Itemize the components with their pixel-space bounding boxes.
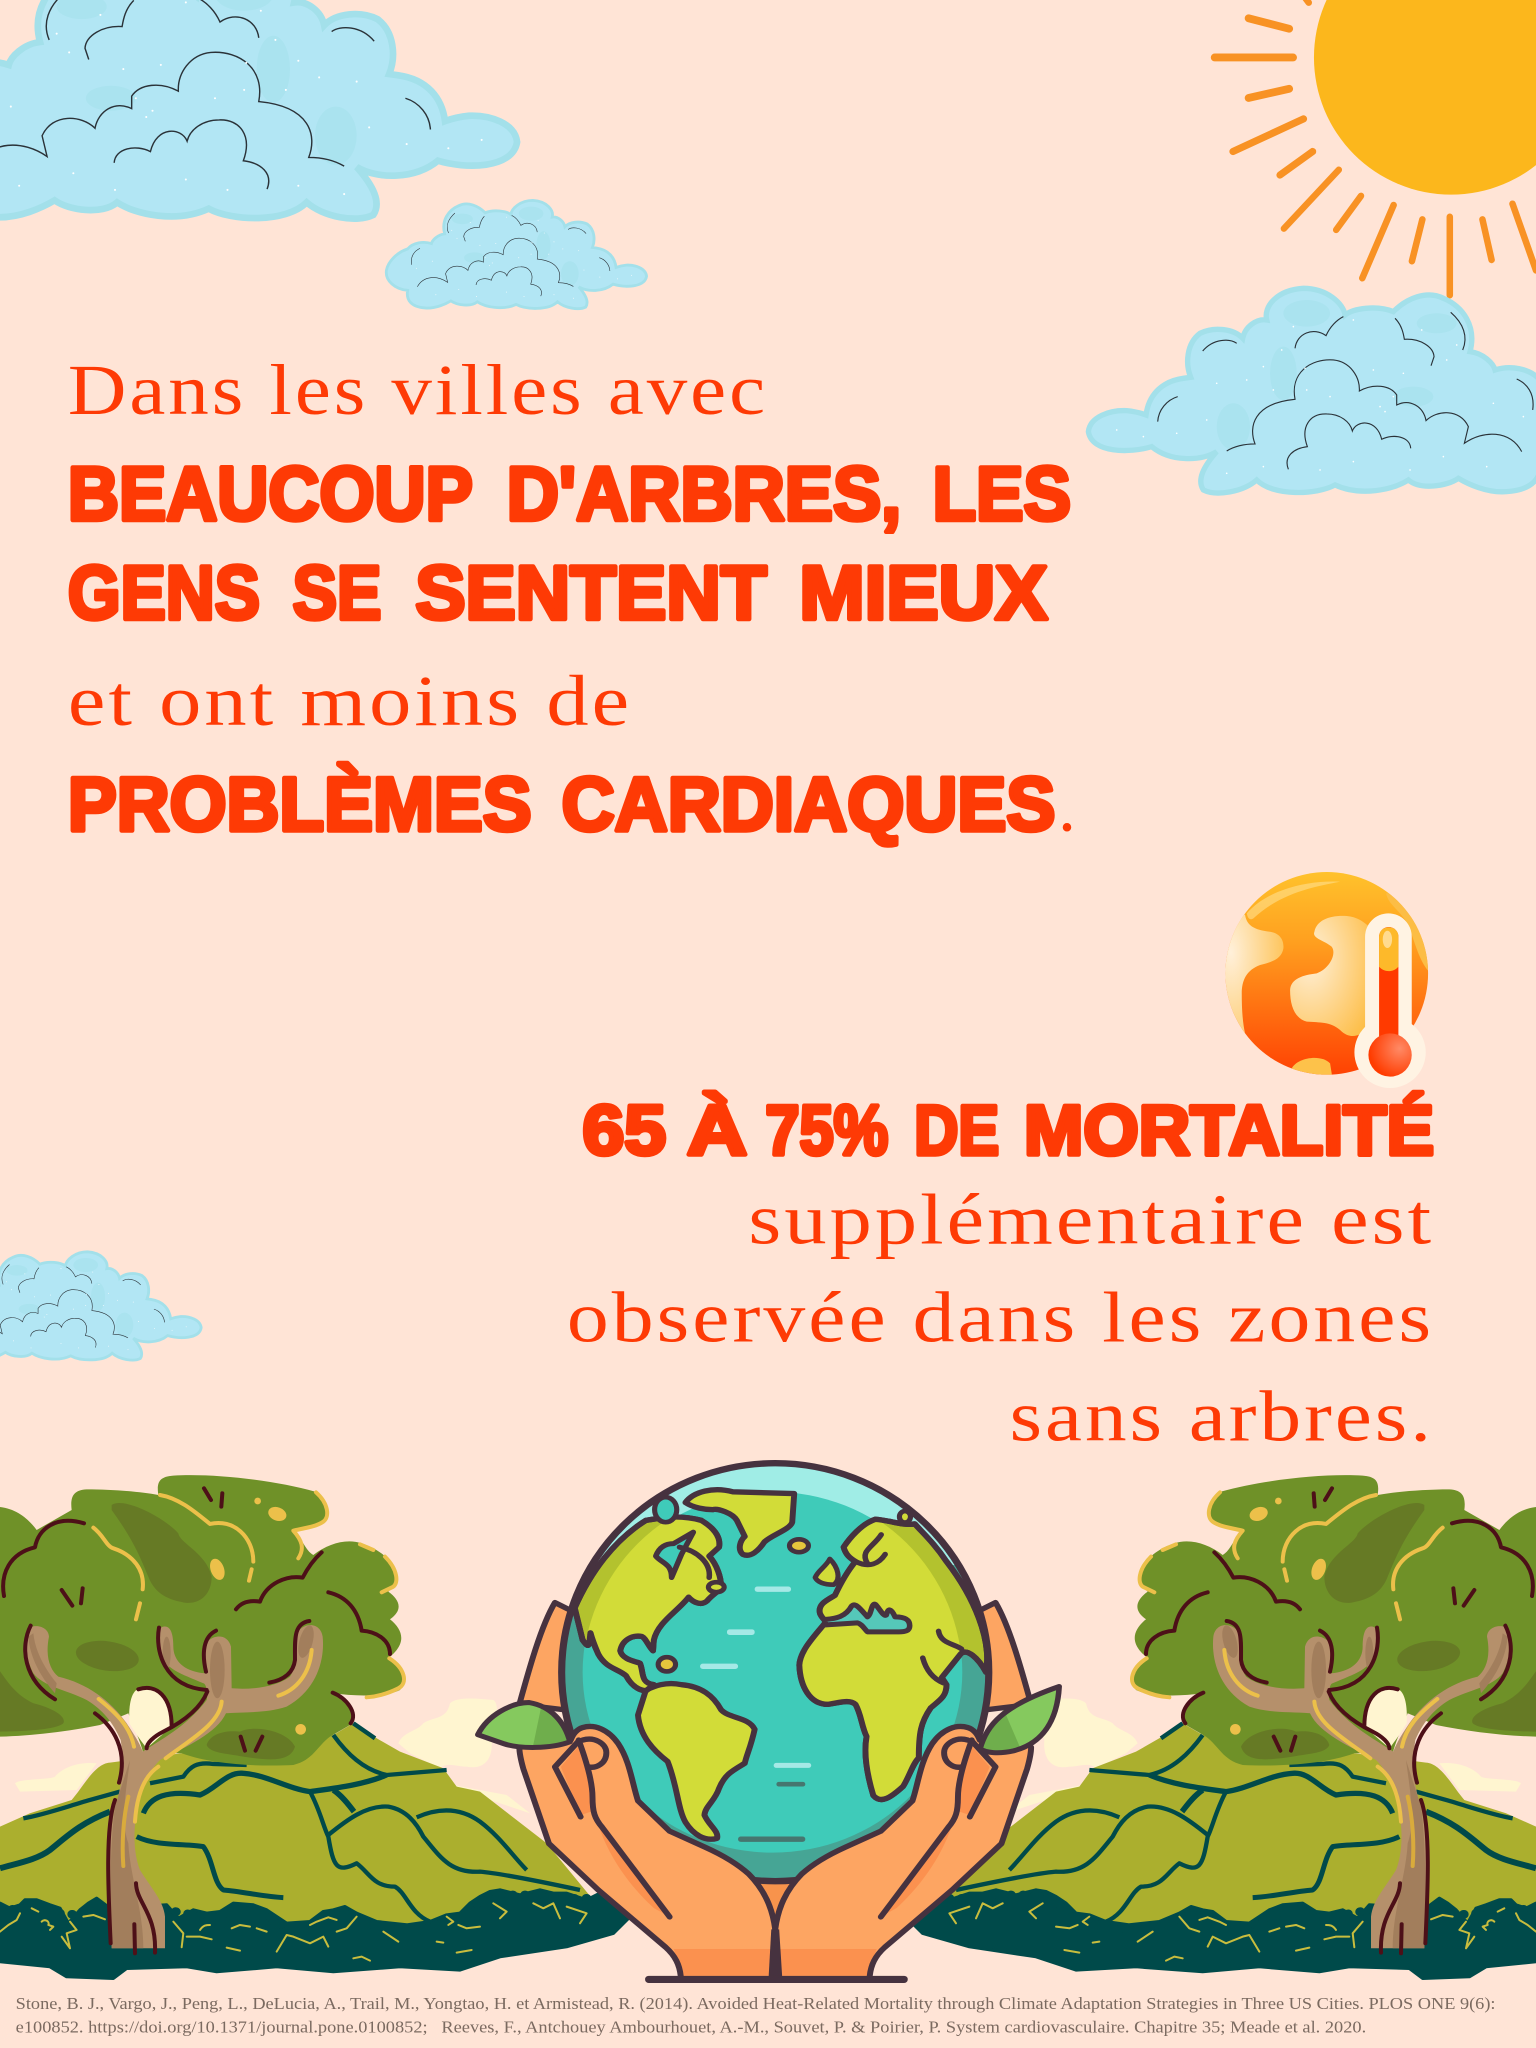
emphasis line 3: PROBLÈMES bbox=[68, 763, 532, 848]
continent: North America bbox=[575, 1517, 721, 1691]
mortality statistic: DE bbox=[914, 1091, 999, 1170]
leaf: left bbox=[478, 1703, 570, 1747]
bushes: right bbox=[906, 1890, 1536, 1978]
mortality statistic: MORTALITÉ bbox=[1024, 1091, 1434, 1170]
wrist wedge bbox=[759, 1883, 792, 1933]
right back fingers bbox=[972, 1603, 1031, 1711]
illustration: hands holding globe bbox=[478, 1458, 1059, 1983]
right hand front bbox=[775, 1726, 1031, 1976]
mortality line 4: sans arbres. bbox=[1010, 1377, 1434, 1457]
cloud: top right bbox=[1088, 288, 1536, 493]
continent: Africa and Eurasia bbox=[799, 1519, 987, 1799]
globe bbox=[539, 1458, 1014, 1881]
left hand front bbox=[519, 1726, 775, 1976]
background: pale clouds left bbox=[15, 1698, 530, 1813]
bushes: left bbox=[0, 1890, 630, 1978]
emphasis line 2: MIEUX bbox=[799, 551, 1048, 636]
tree: left bbox=[0, 1475, 404, 1953]
continent: Greenland bbox=[685, 1490, 794, 1555]
hill: right mountain bbox=[943, 1723, 1536, 1927]
reference line 1: Stone, B. J., Vargo, J., Peng, L., DeLucia, A., Trail, M., Yongtao, H. et Armistead, R. (2014). Avoided Heat-Related Mortality through Climate Adaptation Strategies in Three US Cities. PLOS ONE 9(6): bbox=[16, 1994, 1496, 2013]
center wrist line and base bar bbox=[645, 1929, 908, 1983]
cloud: top small bbox=[386, 200, 647, 309]
emphasis line 1: D'ARBRES, bbox=[507, 452, 901, 537]
emphasis line 3: CARDIAQUES bbox=[562, 763, 1055, 848]
text block: mortality bbox=[567, 1091, 1434, 1457]
emphasis line 3 bbox=[68, 763, 1076, 848]
footnote: references bbox=[16, 1994, 1496, 2036]
mortality statistic: 75% bbox=[765, 1091, 888, 1170]
icon: hot globe with thermometer bbox=[1225, 872, 1428, 1088]
mediterranean sea bbox=[824, 1604, 910, 1632]
mortality line 3: observée dans les zones bbox=[567, 1277, 1434, 1357]
intro line 2: et ont moins de bbox=[68, 661, 632, 741]
hill: left mountain bbox=[0, 1723, 593, 1927]
emphasis line 2: GENS bbox=[68, 551, 260, 636]
tree: right bbox=[1132, 1475, 1536, 1953]
mortality line 2: supplémentaire est bbox=[748, 1179, 1434, 1259]
ocean highlights bbox=[700, 1586, 811, 1768]
emphasis line 3: . bbox=[1058, 767, 1076, 847]
emphasis line 2: SENTENT bbox=[415, 551, 767, 636]
cloud: lower left small bbox=[0, 1252, 201, 1360]
reference line 2: e100852. https://doi.org/10.1371/journal.pone.0100852; Reeves, F., Antchouey Ambourhouet, A.-M., Souvet, P. & Poirier, P. System cardiovasculaire. Chapitre 35; Meade et al. 2020. bbox=[16, 2017, 1366, 2036]
intro line 1: Dans les villes avec bbox=[68, 350, 768, 430]
mortality statistic: 65 bbox=[583, 1091, 666, 1170]
emphasis line 1: LES bbox=[933, 452, 1071, 537]
leaf: right bbox=[980, 1686, 1059, 1753]
emphasis line 2: SE bbox=[293, 551, 381, 636]
cloud: top left large bbox=[0, 0, 517, 219]
hudson bay bbox=[656, 1532, 693, 1578]
mortality statistic bbox=[583, 1091, 1434, 1170]
background: pale clouds right bbox=[1006, 1698, 1521, 1813]
icon: sun bbox=[1215, 0, 1536, 295]
emphasis line 1: BEAUCOUP bbox=[68, 452, 473, 537]
continent: South America bbox=[638, 1684, 755, 1839]
emphasis line 2 bbox=[68, 551, 1048, 636]
text block: intro bbox=[68, 350, 1076, 848]
mortality statistic: À bbox=[687, 1091, 747, 1170]
emphasis line 1 bbox=[68, 452, 1071, 537]
seams and islands bbox=[591, 1535, 962, 1683]
left back fingers bbox=[519, 1603, 579, 1711]
